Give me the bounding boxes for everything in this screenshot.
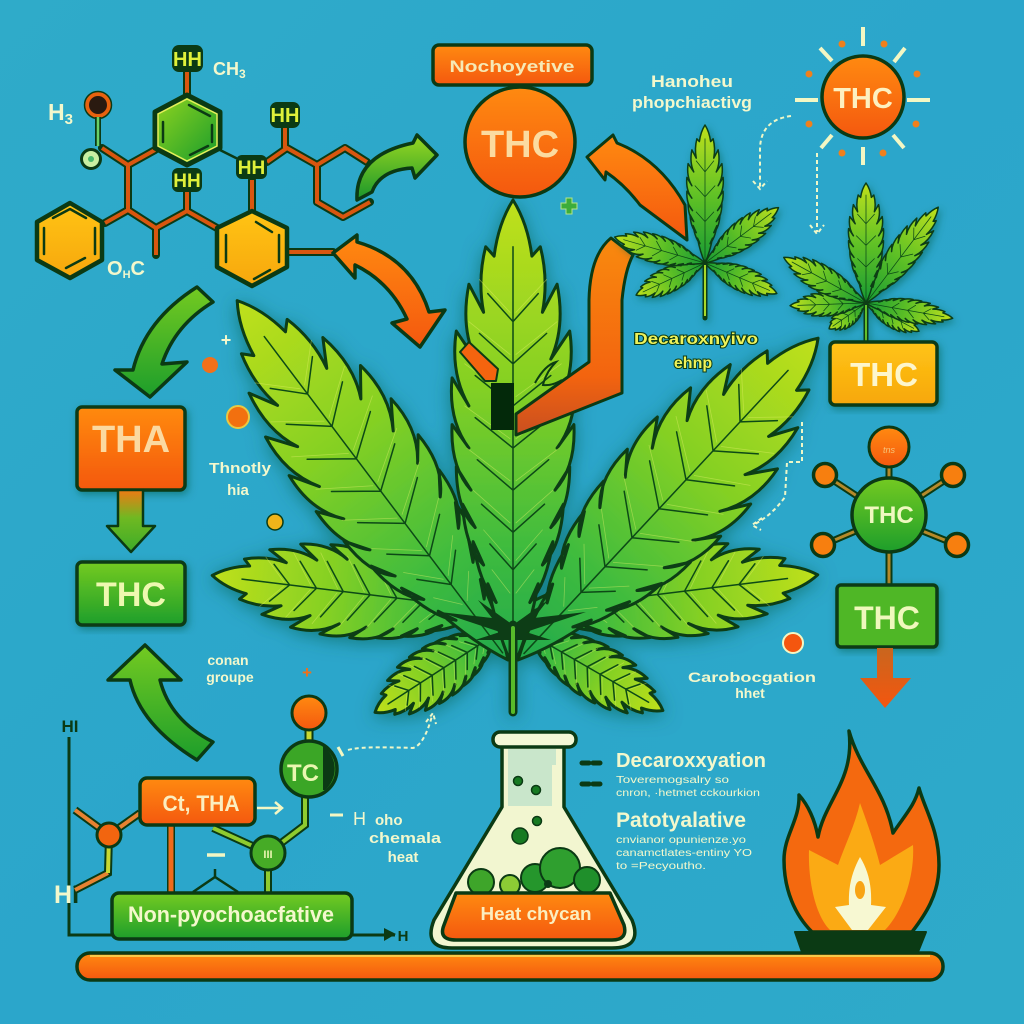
label conan groupe: conan xyxy=(207,652,249,668)
orange node xyxy=(97,823,121,847)
label Decaroxnyivo: Decaroxnyivo xyxy=(634,331,758,348)
flask glare xyxy=(508,749,556,806)
yellow hexagon ring right xyxy=(217,211,287,286)
label chemala heat xyxy=(330,809,442,866)
text block decarboxylation: canamctlates-entiny YO xyxy=(616,848,752,859)
flame core xyxy=(835,857,886,930)
flask lip xyxy=(493,732,576,747)
label box THA: THA xyxy=(92,419,170,461)
plus sign left: + xyxy=(221,330,231,350)
label box THA xyxy=(77,407,185,490)
flask xyxy=(431,732,635,948)
axis lines: HI xyxy=(62,717,78,736)
axis lines: H xyxy=(398,928,408,945)
label Carobocgation xyxy=(688,669,816,701)
label chemala heat: heat xyxy=(388,849,418,866)
text block decarboxylation: Decaroxxyation xyxy=(616,750,766,772)
label Hanoheu phopchiactivg: Hanoheu xyxy=(651,72,733,91)
H atom centre: HH xyxy=(173,171,201,192)
arrow: orange curved to THC xyxy=(587,135,687,240)
label Carobocgation: Carobocgation xyxy=(688,669,816,685)
leaf cut-out xyxy=(491,383,514,430)
label box THC green right: THC xyxy=(854,600,920,636)
side nodes xyxy=(812,464,968,556)
yellow hexagon ring left xyxy=(37,203,102,278)
arrow: down right xyxy=(860,648,911,708)
H atom right: HH xyxy=(271,105,299,127)
sparkle green xyxy=(561,198,577,214)
H atom top: HH xyxy=(173,49,202,71)
arrow: THA to THC xyxy=(107,490,155,552)
label OHC: O xyxy=(107,258,123,280)
green residue xyxy=(468,848,600,895)
label box THC yellow xyxy=(830,342,937,405)
top label box: Nochoyetive xyxy=(450,57,574,76)
label chemala heat: oho xyxy=(375,812,402,829)
orange liquid xyxy=(442,893,625,940)
label Thnotly hia xyxy=(209,460,272,499)
text block decarboxylation: cnron, ·hetmet cckourkion xyxy=(616,788,760,799)
label H3: H xyxy=(48,99,65,125)
node bonds xyxy=(75,730,309,893)
label box Ct, THA: Ct, THA xyxy=(162,791,240,816)
arrow piece on leaf xyxy=(460,342,498,381)
TC node xyxy=(281,741,337,797)
swirl on leaf xyxy=(535,362,562,385)
label box THC green xyxy=(77,562,185,625)
sun label: THC xyxy=(833,83,893,115)
label Hanoheu phopchiactivg xyxy=(632,72,752,112)
molecule right xyxy=(812,427,968,586)
dotted arrow to leaf xyxy=(348,713,436,750)
flame eye xyxy=(855,881,865,899)
tick xyxy=(338,747,343,756)
arrow: green curved down xyxy=(115,287,213,397)
text block decarboxylation: Toveremogsalry so xyxy=(616,775,730,786)
sun disc xyxy=(822,56,904,138)
text block decarboxylation: Patotyalative xyxy=(616,809,746,832)
label chemala heat: chemala xyxy=(369,830,442,847)
molecule right bonds xyxy=(823,467,957,586)
dotted arrow left of sun xyxy=(753,116,791,189)
burner base xyxy=(795,932,926,952)
label HI: HI xyxy=(54,881,79,909)
text block decarboxylation: cnvianor opunienze.yo xyxy=(616,835,747,846)
molecule bonds xyxy=(102,72,370,255)
sun dots xyxy=(806,40,920,156)
flame xyxy=(784,731,939,932)
label conan groupe: groupe xyxy=(206,669,254,685)
leaf base xyxy=(440,600,586,640)
orange top node xyxy=(292,696,326,730)
dot left middle xyxy=(227,406,249,428)
top node: tns xyxy=(883,445,895,455)
label Thnotly hia: Thnotly xyxy=(209,460,272,477)
text block decarboxylation: to =Pecyoutho. xyxy=(616,861,706,872)
arrow: green curved up xyxy=(108,645,213,760)
top node xyxy=(869,427,909,467)
label conan groupe xyxy=(206,652,254,685)
arrow: green right xyxy=(357,135,437,200)
label box Non-psychoactive: Non-pyochoacfative xyxy=(128,902,334,927)
TC node: TC xyxy=(287,760,319,787)
plus sign orange: + xyxy=(302,663,312,682)
sun rays xyxy=(795,27,930,165)
flask label: Heat chycan xyxy=(480,904,592,924)
THC circle centre top xyxy=(465,87,575,197)
hydroxyl group xyxy=(82,92,112,168)
text block decarboxylation xyxy=(616,750,766,872)
green hexagon ring xyxy=(155,95,220,165)
bottom left diagram xyxy=(54,696,442,945)
axis lines xyxy=(62,717,408,945)
small arrow xyxy=(257,802,282,814)
dotted arrow below sun xyxy=(810,153,824,234)
dash marks xyxy=(582,763,600,784)
H atom middle: HH xyxy=(238,158,265,179)
THC circle centre top: THC xyxy=(481,124,559,166)
label CH3: 3 xyxy=(239,67,246,81)
label box THC green right xyxy=(837,585,937,647)
label CH3: CH xyxy=(213,59,239,79)
label Decaroxnyivo: ehnp xyxy=(674,355,712,372)
top label box xyxy=(433,45,592,85)
centre node xyxy=(852,478,926,552)
green node xyxy=(251,836,285,870)
label H3: 3 xyxy=(65,111,73,128)
molecule: top left structure xyxy=(37,45,370,286)
flask body xyxy=(431,745,635,948)
label box THC green: THC xyxy=(96,576,166,614)
bubbles xyxy=(512,776,542,844)
label Decaroxnyivo xyxy=(634,331,758,372)
flame middle xyxy=(809,803,913,930)
arrow: orange through leaf xyxy=(516,238,633,435)
centre node: THC xyxy=(864,502,914,529)
label box THC yellow: THC xyxy=(850,356,918,393)
label box Non-psychoactive xyxy=(112,893,352,939)
mini leaf left xyxy=(611,125,787,318)
label Hanoheu phopchiactivg: phopchiactivg xyxy=(632,93,752,112)
label box Ct, THA xyxy=(140,778,255,825)
dotted arrow right of leaf xyxy=(752,422,802,530)
orange bench bar xyxy=(77,953,943,980)
main cannabis leaf xyxy=(186,200,865,736)
label Carobocgation: hhet xyxy=(735,685,765,701)
dot right xyxy=(783,633,803,653)
label OHC: H xyxy=(123,269,131,281)
flame outer xyxy=(784,731,939,932)
mini leaf right xyxy=(777,183,955,342)
label OHC: C xyxy=(131,258,145,280)
THC sun xyxy=(795,27,930,165)
arrow: orange to leaf xyxy=(333,235,445,347)
dot left upper xyxy=(202,357,218,373)
green node: III xyxy=(263,849,273,861)
label Thnotly hia: hia xyxy=(227,482,249,499)
leaf stem xyxy=(508,625,518,712)
label chemala heat: H xyxy=(353,809,366,829)
dot yellow xyxy=(267,514,283,530)
